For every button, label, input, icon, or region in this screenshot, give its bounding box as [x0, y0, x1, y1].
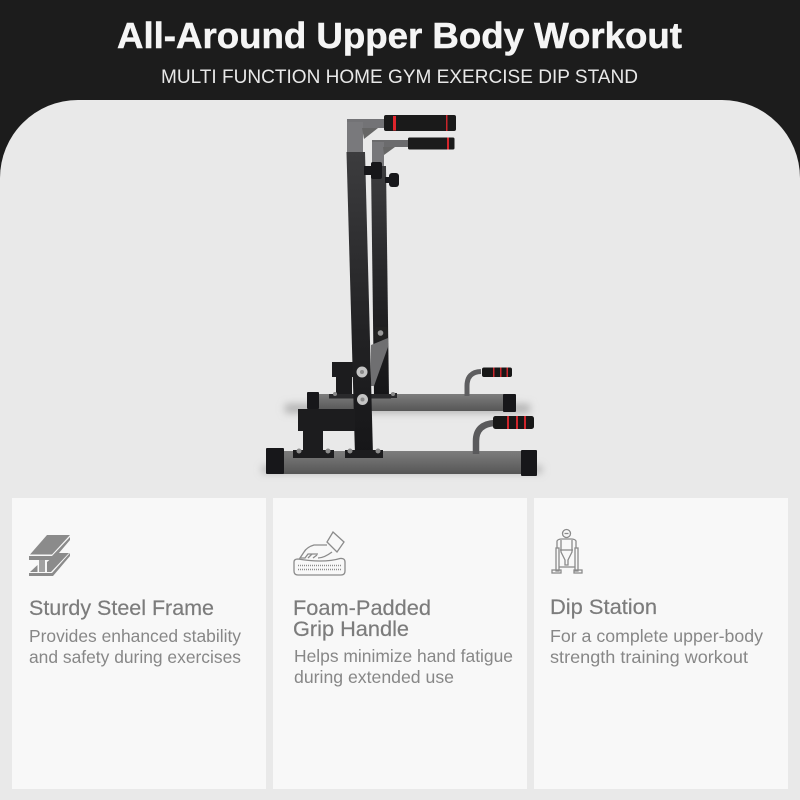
heading: Dip Station [550, 595, 657, 619]
icon: steel beam [29, 535, 70, 576]
front base end caps [266, 448, 537, 476]
card background [12, 498, 266, 789]
description: Provides enhanced stability [29, 626, 241, 646]
title: All-Around Upper Body Workout [117, 15, 682, 56]
panel: foam-padded grip handle [273, 498, 527, 789]
rear step [329, 362, 397, 398]
front base tube [280, 451, 525, 474]
description line 2: during extended use [294, 667, 454, 687]
product photo: dip stand [262, 115, 542, 476]
icon: hand on foam [294, 532, 345, 575]
rear base end caps [307, 392, 516, 412]
brace [371, 338, 388, 386]
base bolts [296, 392, 395, 454]
floor shadows [262, 404, 542, 473]
frame bolts [356, 366, 368, 405]
panel: dip station [534, 498, 788, 789]
header band [0, 0, 800, 180]
heading line 2: Grip Handle [293, 617, 409, 641]
rear base tube [317, 394, 507, 411]
adjustment knobs [364, 162, 399, 187]
icon: person on dip bars [552, 530, 582, 573]
card background [534, 498, 788, 789]
heading: Foam-Padded [293, 596, 431, 620]
front upright with grip [346, 115, 456, 455]
heading: Sturdy Steel Frame [29, 596, 214, 620]
description line 2: strength training workout [550, 647, 748, 667]
front step [293, 409, 383, 458]
rear handle [467, 368, 512, 396]
panel: sturdy steel frame [12, 498, 266, 789]
description: For a complete upper-body [550, 626, 763, 646]
card background [273, 498, 527, 789]
subtitle: MULTI FUNCTION HOME GYM EXERCISE DIP STAND [161, 66, 638, 88]
rear upright with handle [371, 138, 454, 397]
description line 2: and safety during exercises [29, 647, 241, 667]
description: Helps minimize hand fatigue [294, 646, 513, 666]
front handle [476, 416, 534, 454]
